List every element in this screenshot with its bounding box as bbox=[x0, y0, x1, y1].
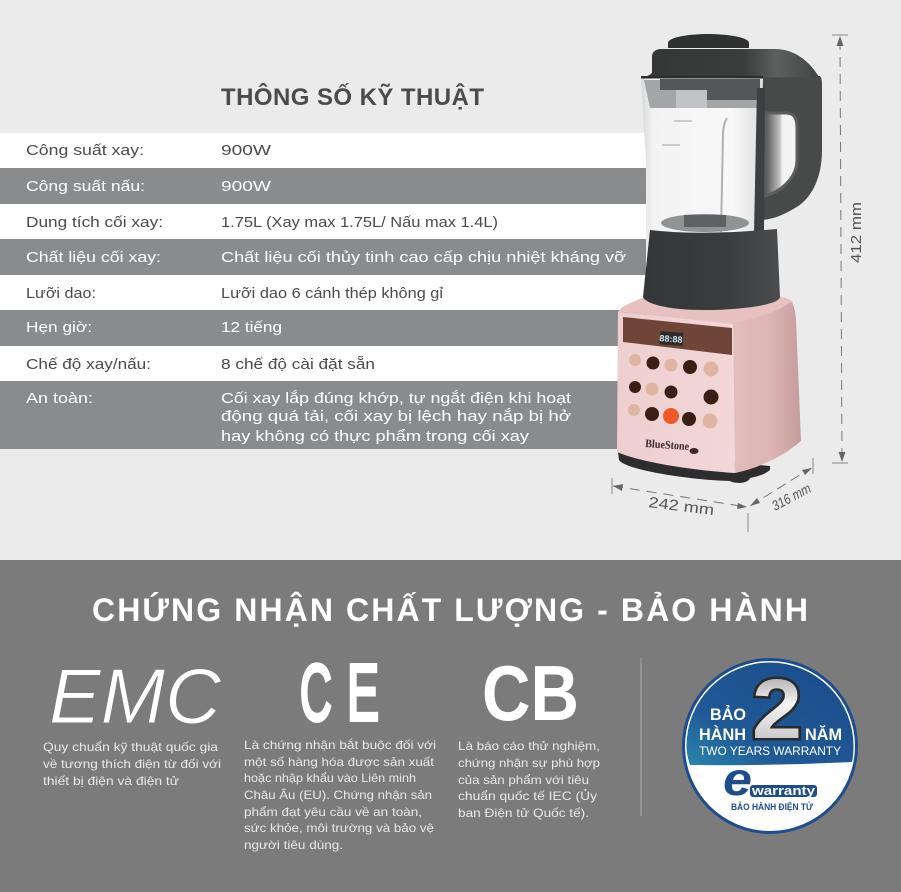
row: safety: An toàn: bbox=[26, 390, 93, 407]
lid knob bbox=[668, 34, 749, 48]
badge number: 2 bbox=[752, 662, 802, 756]
e-warranty logo bbox=[723, 753, 817, 805]
row: timer bbox=[0, 310, 646, 346]
row: jar material bbox=[0, 239, 646, 275]
glass jar bbox=[641, 78, 763, 233]
dimension: height 412 mm: 412 mm bbox=[848, 202, 865, 263]
panel: quality certification and warranty bbox=[0, 560, 901, 892]
row: jar capacity bbox=[0, 204, 646, 239]
dimension: depth 316 mm bbox=[748, 458, 814, 532]
badge: 2 year warranty bbox=[682, 658, 858, 834]
control buttons bbox=[628, 354, 718, 428]
row: cooking power bbox=[0, 168, 646, 204]
jar blade assembly bbox=[661, 214, 749, 232]
blender product image bbox=[617, 34, 822, 483]
heading: technical specifications: THÔNG SỐ KỸ THUẬT bbox=[221, 83, 484, 111]
badge: 2 year warranty: NĂM bbox=[805, 725, 842, 744]
row: timer: 12 tiếng bbox=[221, 319, 282, 336]
row: jar capacity: Dung tích cối xay: bbox=[26, 214, 163, 231]
logo: CB: CB bbox=[482, 649, 579, 737]
badge text: BẢO bbox=[710, 705, 746, 724]
text: CB description: chuẩn quốc tế IEC (Ủy bbox=[458, 788, 597, 803]
row: safety bbox=[0, 381, 646, 449]
text: EMC description: Quy chuẩn kỹ thuật quốc gia bbox=[43, 740, 218, 754]
text: CE description: sức khỏe, môi trường và bảo vệ bbox=[244, 821, 434, 835]
handle bbox=[760, 76, 822, 220]
electronic warranty caption: BẢO HÀNH ĐIỆN TỬ bbox=[731, 801, 813, 813]
row: safety: động quá tải, cối xay bị lệch hay nắp bị hở bbox=[221, 408, 571, 425]
badge: 2 year warranty: HÀNH bbox=[699, 725, 746, 744]
text: CE description: hoặc nhập khẩu vào Liên minh bbox=[244, 771, 416, 785]
lid bbox=[641, 49, 819, 78]
row: jar capacity: 1.75L (Xay max 1.75L/ Nấu max 1.4L) bbox=[221, 214, 498, 231]
text: CE description: Là chứng nhận bắt buộc đối với bbox=[244, 737, 436, 752]
background bbox=[0, 0, 901, 560]
dimension: depth 316 mm: 316 mm bbox=[769, 480, 814, 514]
display band bbox=[623, 317, 732, 355]
row: jar material: Chất liệu cối xay: bbox=[26, 249, 161, 266]
row: safety: hay không có thực phẩm trong cối xay bbox=[221, 428, 530, 445]
row: blade: Lưỡi dao: bbox=[26, 285, 96, 302]
text: CB description bbox=[458, 739, 600, 820]
text: EMC description bbox=[43, 740, 221, 788]
pink base side bbox=[733, 302, 801, 473]
handle opening bbox=[765, 113, 797, 196]
row: modes: Chế độ xay/nấu: bbox=[26, 356, 151, 373]
text: CE description: người tiêu dùng. bbox=[244, 838, 343, 852]
heading: certification: CHỨNG NHẬN CHẤT LƯỢNG - BẢO HÀNH bbox=[92, 592, 808, 628]
row: cooking power: Công suất nấu: bbox=[26, 178, 145, 195]
jar collar band bbox=[644, 80, 760, 108]
row: blade bbox=[0, 275, 646, 310]
row: jar material: Chất liệu cối thủy tinh cao cấp chịu nhiệt kháng vỡ bbox=[221, 249, 626, 266]
row: safety: Cối xay lắp đúng khớp, tự ngắt điện khi hoạt bbox=[221, 390, 572, 407]
e-warranty logo: warranty bbox=[751, 783, 816, 798]
dimension: height 412 mm bbox=[832, 35, 865, 463]
row: grinding power: 900W bbox=[221, 142, 272, 159]
pink base front bbox=[617, 312, 735, 473]
jar spine bbox=[754, 88, 765, 233]
spec table bbox=[0, 133, 646, 449]
text: CB description: chứng nhận sự phù hợp bbox=[458, 756, 600, 770]
text: CE description: Châu Âu (EU). Chứng nhận sản bbox=[244, 787, 432, 802]
text: EMC description: thiết bị điện và điện tử bbox=[43, 774, 179, 788]
row: grinding power bbox=[0, 133, 646, 168]
text: CE description bbox=[244, 737, 436, 852]
e-warranty logo: e bbox=[723, 753, 752, 805]
row: grinding power: Công suất xay: bbox=[26, 142, 144, 159]
dimension: width 242 mm: 242 mm bbox=[648, 494, 715, 519]
pink base top rim bbox=[618, 297, 793, 324]
text: EMC description: về tương thích điện từ đối với bbox=[43, 757, 221, 771]
dimension: width 242 mm bbox=[612, 478, 747, 519]
rubber foot bbox=[618, 452, 770, 483]
row: blade: Lưỡi dao 6 cánh thép không gỉ bbox=[221, 285, 444, 302]
jar inner rib bbox=[721, 118, 727, 232]
logo: CE mark: C bbox=[300, 648, 332, 737]
jar scale marks bbox=[662, 121, 692, 145]
motor collar bbox=[643, 229, 780, 310]
logo: CE mark: E bbox=[347, 647, 379, 737]
text: CE description: phẩm đạt yêu cầu về an toàn, bbox=[244, 805, 422, 819]
logo: CE mark bbox=[300, 647, 379, 737]
row: cooking power: 900W bbox=[221, 178, 272, 195]
row: modes: 8 chế độ cài đặt sẵn bbox=[221, 356, 375, 373]
text: CE description: một số hàng hóa được sản xuất bbox=[244, 755, 435, 769]
badge: 2 year warranty: TWO YEARS WARRANTY bbox=[699, 744, 841, 758]
text: CB description: Là báo cáo thử nghiệm, bbox=[458, 739, 600, 753]
text: CB description: của sản phẩm với tiêu bbox=[458, 773, 589, 787]
row: modes bbox=[0, 346, 646, 381]
brand logo: BlueStone bbox=[645, 438, 690, 453]
row: timer: Hẹn giờ: bbox=[26, 319, 92, 336]
text: CB description: ban Điện tử Quốc tế). bbox=[458, 806, 589, 820]
logo: EMC: EMC bbox=[49, 652, 222, 740]
digital display: 88:88 bbox=[659, 333, 683, 345]
